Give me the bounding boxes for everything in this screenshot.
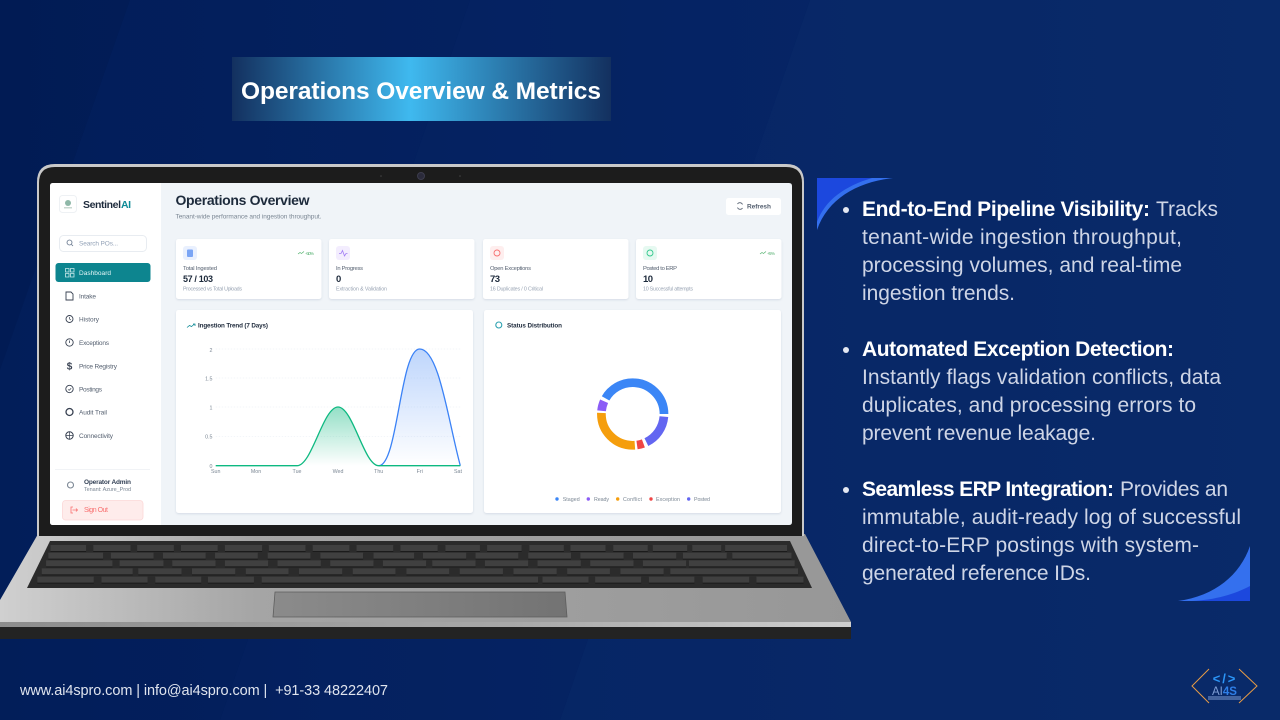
bullet: end-to-end pipeline visibility: [843, 198, 1218, 305]
kpi card: total ingested: 57 / 103: [183, 274, 213, 284]
line chart: ingestion trend: Tue: [293, 469, 302, 475]
page header: Operations Overview: [176, 192, 310, 208]
nav items: [66, 292, 118, 440]
kpi card: posted to erp: 10 Successful attempts: [643, 286, 693, 292]
sidebar: [50, 183, 161, 525]
kpi card: posted to erp: +5%: [767, 251, 775, 256]
bullet: seamless erp integration: generated reference IDs.: [862, 562, 1091, 585]
logo: AI4S: [1192, 669, 1257, 703]
nav items: History: [79, 316, 100, 324]
line chart: ingestion trend: Fri: [417, 469, 423, 475]
logo: AI4S: AI4S: [1212, 686, 1237, 698]
line chart: ingestion trend: 0: [210, 464, 213, 470]
refresh button: Refresh: [747, 204, 771, 210]
laptop lid: [37, 164, 804, 536]
donut chart: status distribution: Status Distribution: [507, 322, 562, 330]
bullet: seamless erp integration: immutable, audit-ready log of successful: [862, 506, 1241, 529]
title banner: [232, 57, 611, 121]
search box: [60, 236, 146, 252]
bullet list: [843, 198, 1241, 585]
line chart: ingestion trend: Sat: [454, 469, 463, 475]
line chart: ingestion trend: 0.5: [205, 434, 213, 440]
nav items: Connectivity: [79, 433, 114, 440]
laptop base: [0, 534, 851, 639]
refresh button: [726, 198, 781, 215]
bullet: seamless erp integration: direct-to-ERP postings with system-: [862, 534, 1199, 557]
logo: Sentinel: [83, 199, 121, 211]
logo: [60, 196, 131, 212]
nav items: Postings: [79, 386, 103, 394]
kpi card: total ingested: Total Ingested: [183, 266, 217, 272]
dashboard screen: [50, 183, 792, 525]
bullet: end-to-end pipeline visibility: processing volumes, and real-time: [862, 254, 1182, 277]
nav items: Audit Trail: [79, 410, 108, 416]
title banner: Operations Overview & Metrics: [241, 78, 601, 105]
kpi card: in progress: In Progress: [336, 266, 363, 272]
line chart: ingestion trend: [176, 310, 473, 513]
legend: Conflict: [623, 497, 643, 503]
bullet: automated exception detection: prevent revenue leakage.: [862, 422, 1096, 445]
kpi card: posted to erp: 10: [643, 274, 653, 285]
kpi card: in progress: 0: [336, 274, 341, 285]
kpi card: total ingested: [176, 239, 322, 299]
line chart: ingestion trend: Thu: [374, 469, 383, 475]
bullet: automated exception detection: Automated Exception Detection:: [862, 338, 1174, 361]
bullet: seamless erp integration: Provides an: [1120, 478, 1228, 501]
page header: Tenant-wide performance and ingestion throughput.: [176, 214, 322, 220]
logo: AI4S: </>: [1213, 671, 1236, 686]
line chart: ingestion trend: Wed: [333, 469, 343, 475]
kpi card: open exceptions: 73: [490, 274, 500, 285]
active nav: dashboard: [56, 263, 150, 282]
decorative corner: bottom: [1178, 546, 1250, 601]
legend: Ready: [594, 497, 609, 503]
legend: [555, 497, 710, 503]
bullet: end-to-end pipeline visibility: tenant-wide ingestion throughput,: [862, 226, 1182, 249]
kpi card: posted to erp: Posted to ERP: [643, 266, 677, 272]
kpi card: total ingested: Processed vs Total Uploads: [183, 286, 242, 292]
bullet: end-to-end pipeline visibility: Tracks: [1156, 198, 1218, 221]
active nav: dashboard: Dashboard: [79, 270, 111, 277]
bullet: seamless erp integration: [843, 478, 1241, 585]
bullet: automated exception detection: [843, 338, 1221, 445]
footer contact: www.ai4spro.com | info@ai4spro.com | +91-33 48222407: [19, 683, 388, 699]
decorative corner: top: [817, 178, 893, 230]
nav items: $: [67, 362, 73, 372]
bullet: automated exception detection: duplicates, and processing errors to: [862, 394, 1196, 417]
legend: Staged: [563, 497, 580, 503]
line chart: ingestion trend: Sun: [211, 469, 220, 475]
nav items: Price Registry: [79, 364, 118, 370]
sign out button: [62, 500, 143, 520]
kpi card: open exceptions: 16 Duplicates / 0 Critical: [490, 286, 543, 292]
kpi card: in progress: [329, 239, 474, 299]
user profile: Operator Admin: [84, 479, 131, 486]
bullet: automated exception detection: Instantly flags validation conflicts, data: [862, 366, 1221, 389]
laptop illustration: [0, 164, 851, 639]
line chart: ingestion trend: 1: [210, 406, 213, 412]
kpi card: total ingested: +10%: [305, 251, 314, 256]
search box: Search POs...: [79, 240, 118, 248]
kpi card: posted to erp: [636, 239, 782, 299]
user profile: Tenant: Azure_Prod: [84, 487, 131, 493]
bullet: end-to-end pipeline visibility: ingestion trends.: [862, 282, 1015, 305]
user profile: [68, 479, 131, 493]
line chart: ingestion trend: Mon: [251, 469, 261, 475]
logo: AI: [121, 199, 131, 211]
page header: [176, 192, 322, 220]
nav items: Intake: [79, 294, 96, 300]
legend: Exception: [656, 497, 680, 503]
line chart: ingestion trend: Ingestion Trend (7 Days): [198, 322, 268, 330]
kpi card: in progress: Extraction & Validation: [336, 286, 387, 292]
nav items: Exceptions: [79, 340, 110, 347]
bullet: seamless erp integration: Seamless ERP Integration:: [862, 478, 1114, 501]
line chart: ingestion trend: 1.5: [205, 376, 213, 382]
legend: Posted: [694, 497, 710, 503]
bullet: end-to-end pipeline visibility: End-to-End Pipeline Visibility:: [862, 198, 1150, 221]
sign out button: Sign Out: [84, 507, 108, 514]
donut chart: status distribution: [484, 310, 781, 513]
kpi card: open exceptions: Open Exceptions: [490, 266, 531, 272]
line chart: ingestion trend: 2: [210, 348, 213, 354]
kpi card: open exceptions: [483, 239, 628, 299]
